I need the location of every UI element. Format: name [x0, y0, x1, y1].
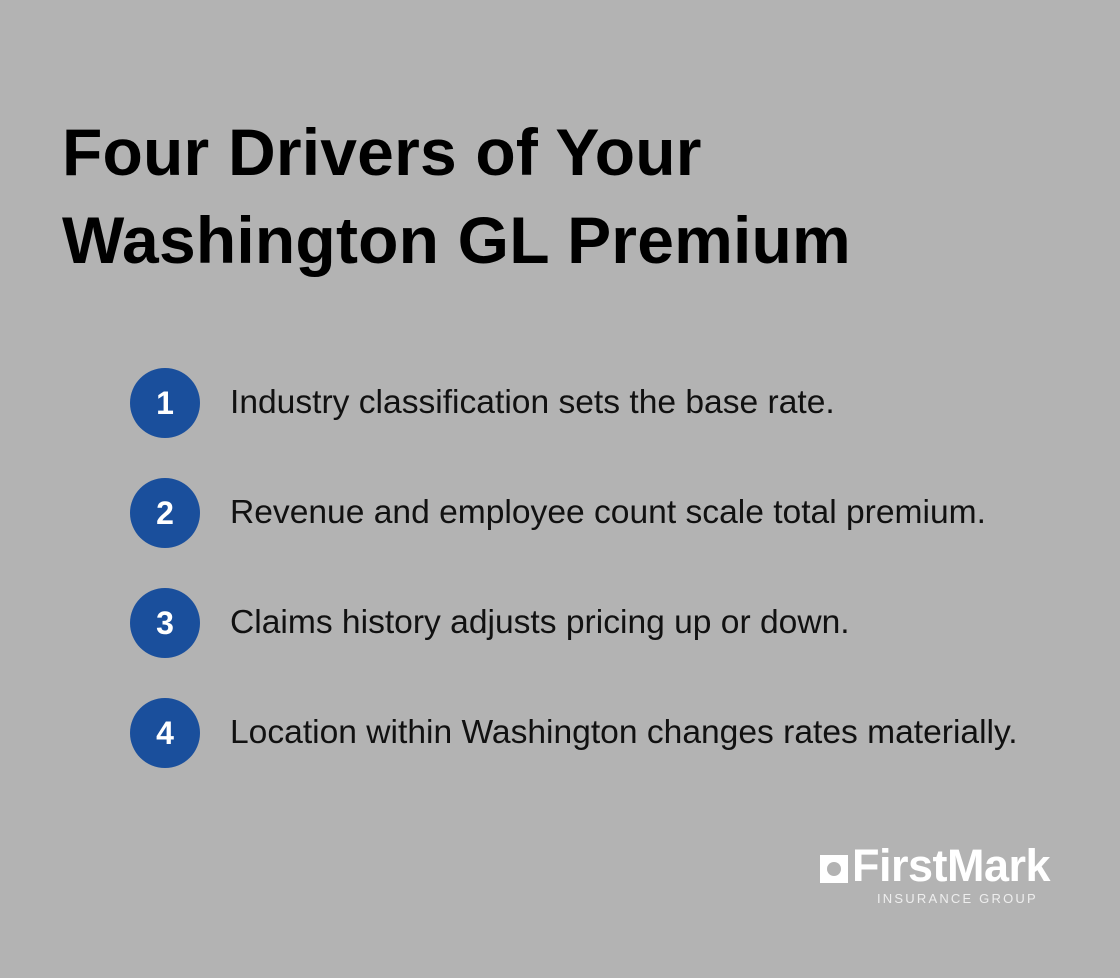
- item 3: 3: [156, 605, 174, 641]
- title: Four Drivers of Your: [62, 115, 702, 189]
- item 3: [130, 588, 850, 658]
- item 4: [130, 698, 1018, 768]
- title: Washington GL Premium: [62, 203, 851, 277]
- logo: FirstMark: [852, 840, 1050, 891]
- item 4: Location within Washington changes rates materially.: [230, 714, 1018, 751]
- item 1: 1: [156, 385, 174, 421]
- title: [62, 115, 851, 277]
- logo: [820, 840, 1050, 906]
- item 3: Claims history adjusts pricing up or down.: [230, 604, 850, 641]
- item 1: Industry classification sets the base rate.: [230, 384, 835, 421]
- item 4: 4: [156, 715, 174, 751]
- item 1: [130, 368, 835, 438]
- item 2: 2: [156, 495, 174, 531]
- logo: INSURANCE GROUP: [877, 891, 1038, 906]
- item 2: Revenue and employee count scale total premium.: [230, 494, 986, 531]
- item 2: [130, 478, 986, 548]
